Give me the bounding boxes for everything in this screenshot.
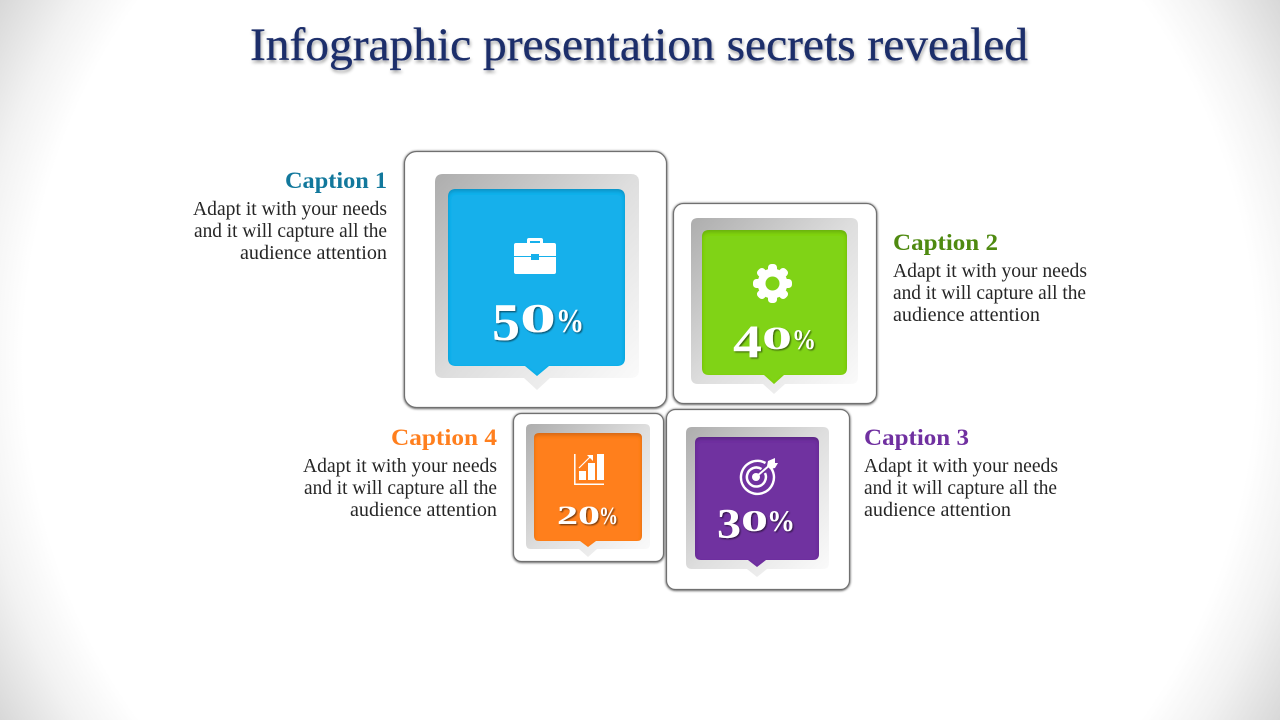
value 20%: 0: [578, 501, 600, 530]
value 30%: [717, 502, 795, 548]
text: caption 2: Caption 2: [893, 230, 998, 255]
value 50%: [492, 294, 584, 352]
title: Infographic presentation secrets revealed: [250, 19, 1028, 71]
green square: [702, 230, 847, 384]
value 20%: 2: [557, 501, 578, 530]
text: caption 2: [893, 230, 1087, 326]
text: caption 2: and it will capture all the: [893, 283, 1086, 304]
panel: card 2, green 40%: [674, 204, 876, 404]
gray frame 4: [526, 424, 650, 557]
text: caption 2: Adapt it with your needs: [893, 261, 1087, 282]
text: caption 4: audience attention: [350, 500, 497, 521]
value 50%: %: [556, 303, 584, 340]
gray frame 2: [691, 218, 858, 394]
value 40%: 0: [762, 321, 792, 357]
value 40%: 4: [733, 316, 762, 368]
text: caption 4: Adapt it with your needs: [303, 456, 497, 477]
text: caption 4: and it will capture all the: [304, 478, 497, 499]
value 20%: %: [599, 503, 618, 530]
text: caption 4: [303, 425, 498, 521]
text: caption 2: audience attention: [893, 305, 1040, 326]
gray frame 1: [435, 174, 639, 390]
text: caption 3: and it will capture all the: [864, 478, 1057, 499]
value 50%: 0: [520, 295, 556, 341]
text: caption 1: [193, 168, 387, 264]
value 40%: %: [792, 325, 816, 356]
text: caption 1: and it will capture all the: [194, 221, 387, 242]
icon: briefcase: [514, 238, 556, 274]
value 30%: 3: [717, 502, 741, 548]
text: caption 3: audience attention: [864, 500, 1011, 521]
value 40%: [733, 316, 816, 368]
gray frame 3: [686, 427, 829, 577]
text: caption 1: Caption 1: [285, 168, 387, 193]
text: caption 3: Caption 3: [864, 425, 969, 450]
icon: bar chart: [575, 454, 604, 484]
text: caption 1: audience attention: [240, 243, 387, 264]
icon: target: [741, 458, 778, 494]
icon: gear: [753, 264, 792, 303]
value 20%: [557, 501, 618, 530]
value 30%: %: [767, 503, 795, 538]
orange square: [534, 433, 642, 547]
panel: card 3, purple 30%: [666, 410, 850, 590]
text: caption 3: [864, 425, 1058, 521]
value 50%: 5: [492, 294, 520, 352]
blue square: [448, 189, 625, 376]
text: caption 4: Caption 4: [391, 425, 498, 450]
panel: card 1, blue 50%: [404, 152, 666, 408]
value 30%: 0: [741, 503, 768, 538]
panel: card 4, orange 20%: [514, 414, 664, 562]
purple square: [695, 437, 819, 567]
text: caption 3: Adapt it with your needs: [864, 456, 1058, 477]
text: caption 1: Adapt it with your needs: [193, 199, 387, 220]
